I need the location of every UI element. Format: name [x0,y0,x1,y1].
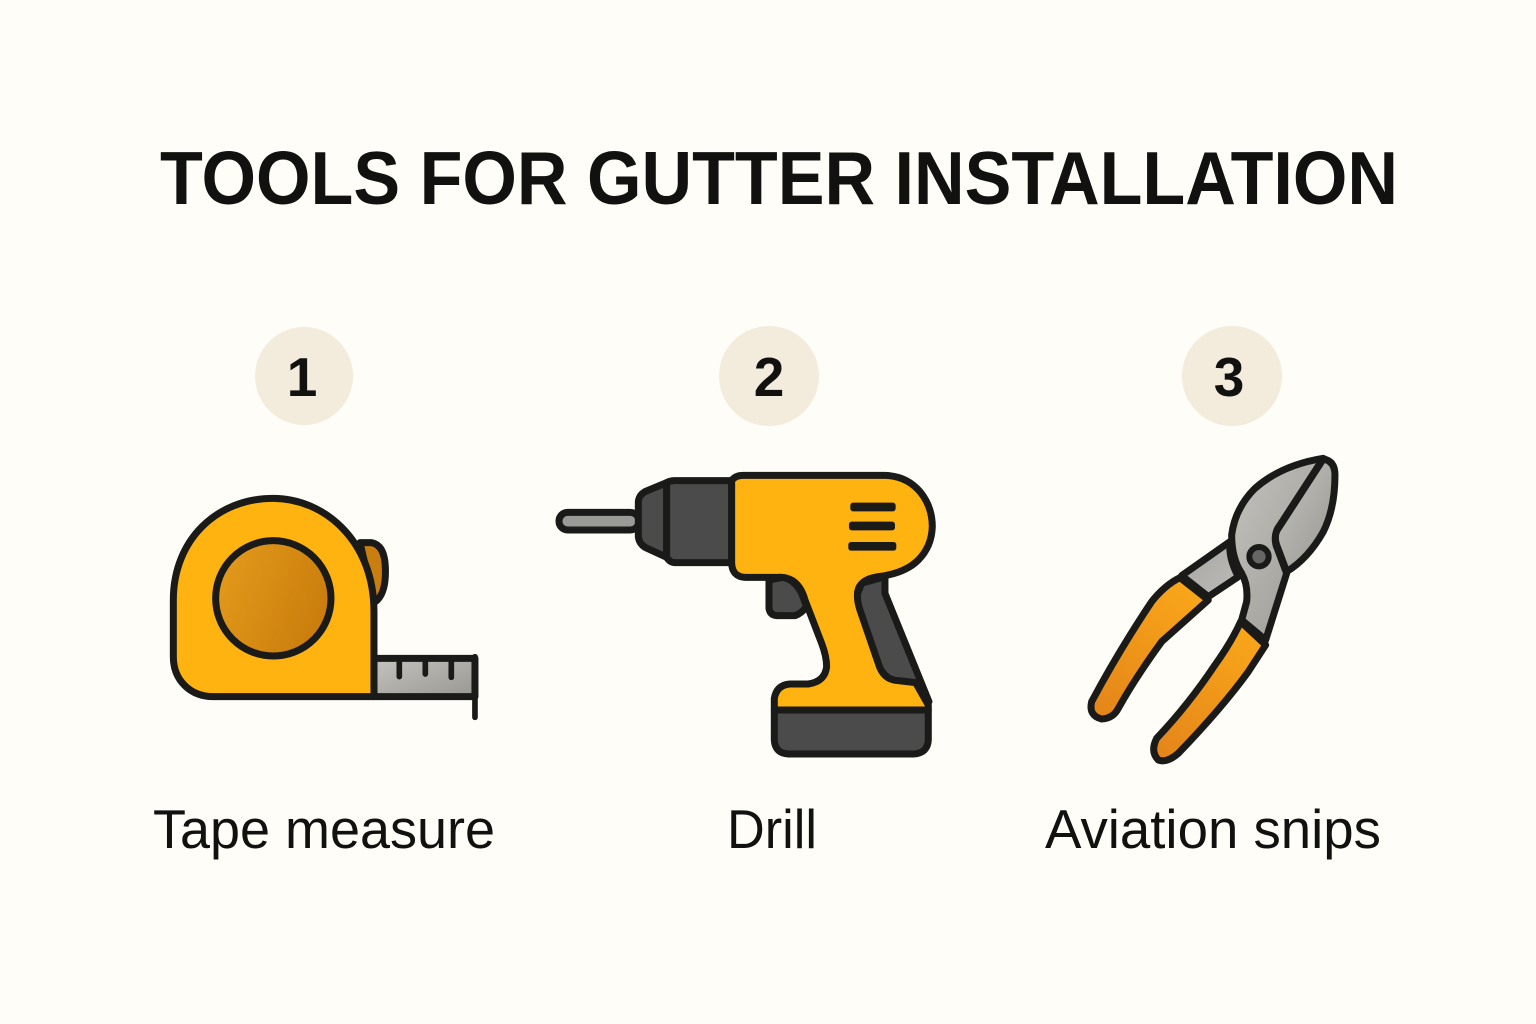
number badge 3: 3 [1214,346,1244,408]
column: tape measure [153,327,495,860]
icon: tape measure [173,498,475,717]
label: aviation snips: Aviation snips [1045,798,1381,860]
title: TOOLS FOR GUTTER INSTALLATION [160,136,1398,220]
number badge 1: 1 [287,346,317,408]
label: drill: Drill [727,798,817,860]
label: tape measure: Tape measure [153,798,495,860]
column: aviation snips [1045,326,1381,860]
number badge 2 [719,326,819,426]
icon: aviation snips [1091,458,1335,761]
column: drill [559,326,932,860]
icon: drill [559,475,932,754]
number badge 2: 2 [754,346,784,408]
number badge 3 [1182,326,1282,426]
number badge 1 [255,327,353,425]
